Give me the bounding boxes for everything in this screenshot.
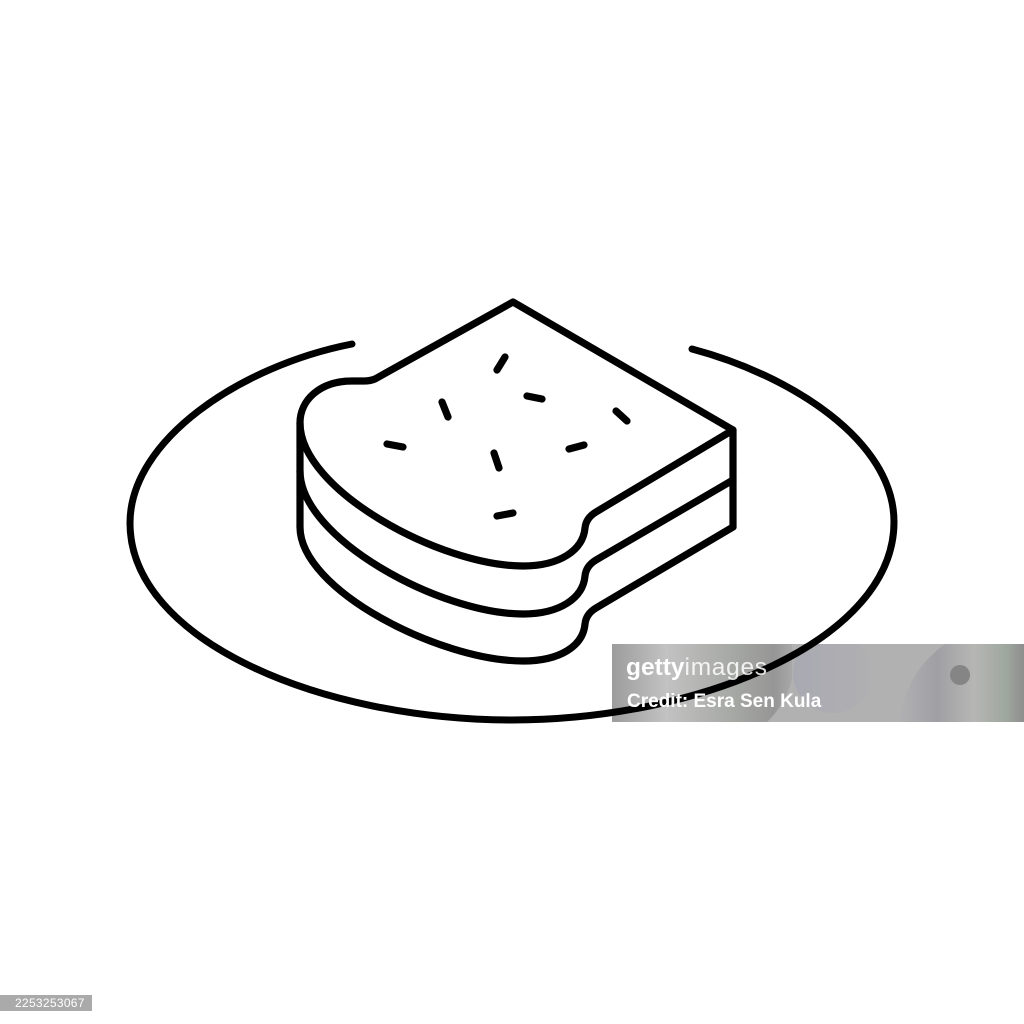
image id tag: 2253253067	[15, 996, 85, 1010]
watermark logo: gettyimages	[626, 654, 768, 681]
sandwich	[300, 302, 733, 661]
middle slice edge	[300, 471, 733, 614]
top slice	[300, 302, 733, 566]
watermark credit: Credit: Esra Sen Kula	[627, 691, 822, 712]
image id tag	[0, 995, 92, 1011]
watermark panel	[612, 644, 1024, 722]
side edges	[300, 423, 733, 527]
plate	[130, 344, 894, 720]
bottom slice edge	[300, 527, 733, 661]
sprinkles	[387, 357, 627, 516]
